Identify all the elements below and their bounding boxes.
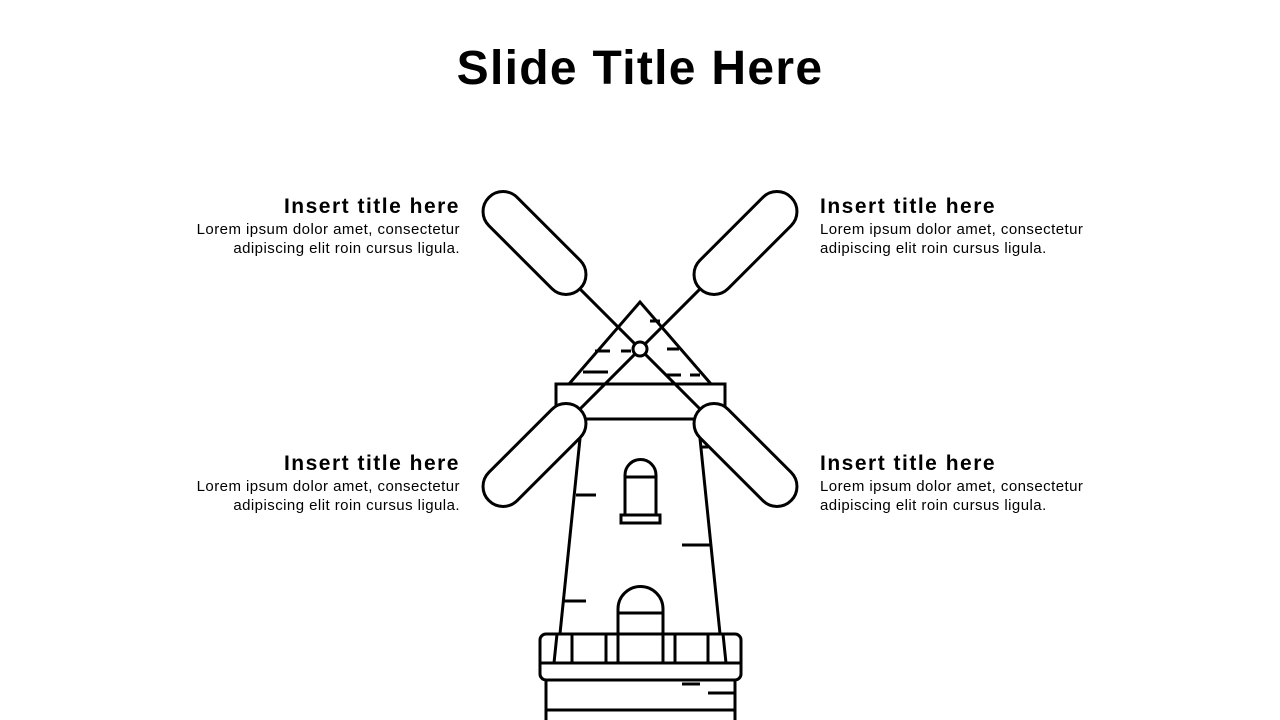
window bbox=[621, 460, 660, 523]
text block: bottom right: Lorem ipsum dolor amet, consectetur bbox=[820, 478, 1083, 495]
door bbox=[618, 586, 663, 663]
text block: bottom right: Insert title here bbox=[820, 452, 996, 475]
text block: top right bbox=[820, 195, 1083, 257]
text block: top left bbox=[197, 195, 460, 257]
text block: bottom left: adipiscing elit roin cursus ligula. bbox=[233, 497, 460, 514]
text block: bottom right: adipiscing elit roin cursus ligula. bbox=[820, 497, 1047, 514]
text block: bottom left: Lorem ipsum dolor amet, consectetur bbox=[197, 478, 460, 495]
text block: top right: adipiscing elit roin cursus ligula. bbox=[820, 240, 1047, 257]
text block: top left: Lorem ipsum dolor amet, consectetur bbox=[197, 221, 460, 238]
gallery and base bbox=[540, 634, 741, 720]
tower body bbox=[556, 302, 725, 663]
text block: top right: Insert title here bbox=[820, 195, 996, 218]
title: Slide Title Here bbox=[457, 42, 823, 95]
sails bbox=[475, 183, 805, 515]
text block: top left: adipiscing elit roin cursus ligula. bbox=[233, 240, 460, 257]
text block: bottom right bbox=[820, 452, 1083, 514]
text block: bottom left bbox=[197, 452, 460, 514]
text block: bottom left: Insert title here bbox=[284, 452, 460, 475]
text block: top left: Insert title here bbox=[284, 195, 460, 218]
text block: top right: Lorem ipsum dolor amet, consectetur bbox=[820, 221, 1083, 238]
